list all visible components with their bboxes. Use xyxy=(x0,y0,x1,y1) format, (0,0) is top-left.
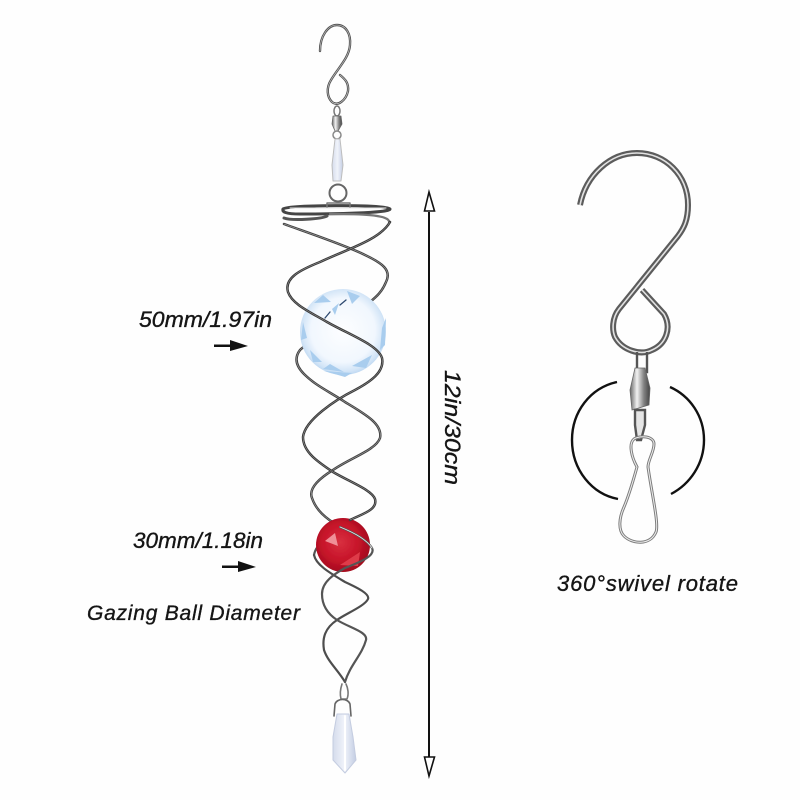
small clear crystal link xyxy=(332,139,343,181)
rotation arc right xyxy=(670,387,704,494)
top coil xyxy=(283,203,390,223)
wire strand in front of balls xyxy=(287,222,390,682)
swivel assembly xyxy=(620,352,657,542)
small swivel xyxy=(332,106,342,139)
rotation arc left xyxy=(572,382,618,499)
top ring link xyxy=(330,184,346,202)
small ball size label: 30mm/1.18in xyxy=(133,528,263,553)
snap clip xyxy=(620,437,657,542)
large S hook xyxy=(580,153,688,352)
height label: 12in/30cm xyxy=(440,370,465,485)
small ball arrow xyxy=(222,561,256,572)
large clear gazing ball xyxy=(300,289,386,377)
wind spinner product xyxy=(283,25,390,773)
height dimension arrow xyxy=(424,192,434,776)
small red gazing ball xyxy=(316,518,370,572)
swivel lower link xyxy=(635,410,645,440)
bottom pendant crystal xyxy=(333,684,356,773)
swivel barrel xyxy=(630,368,650,410)
large ball arrow xyxy=(214,340,248,351)
gazing ball caption: Gazing Ball Diameter xyxy=(87,602,301,625)
wire strand behind balls xyxy=(284,224,388,555)
swivel upper link xyxy=(637,352,647,372)
swivel caption: 360°swivel rotate xyxy=(557,571,738,596)
small S hook xyxy=(320,25,350,104)
large ball size label: 50mm/1.97in xyxy=(139,307,272,332)
